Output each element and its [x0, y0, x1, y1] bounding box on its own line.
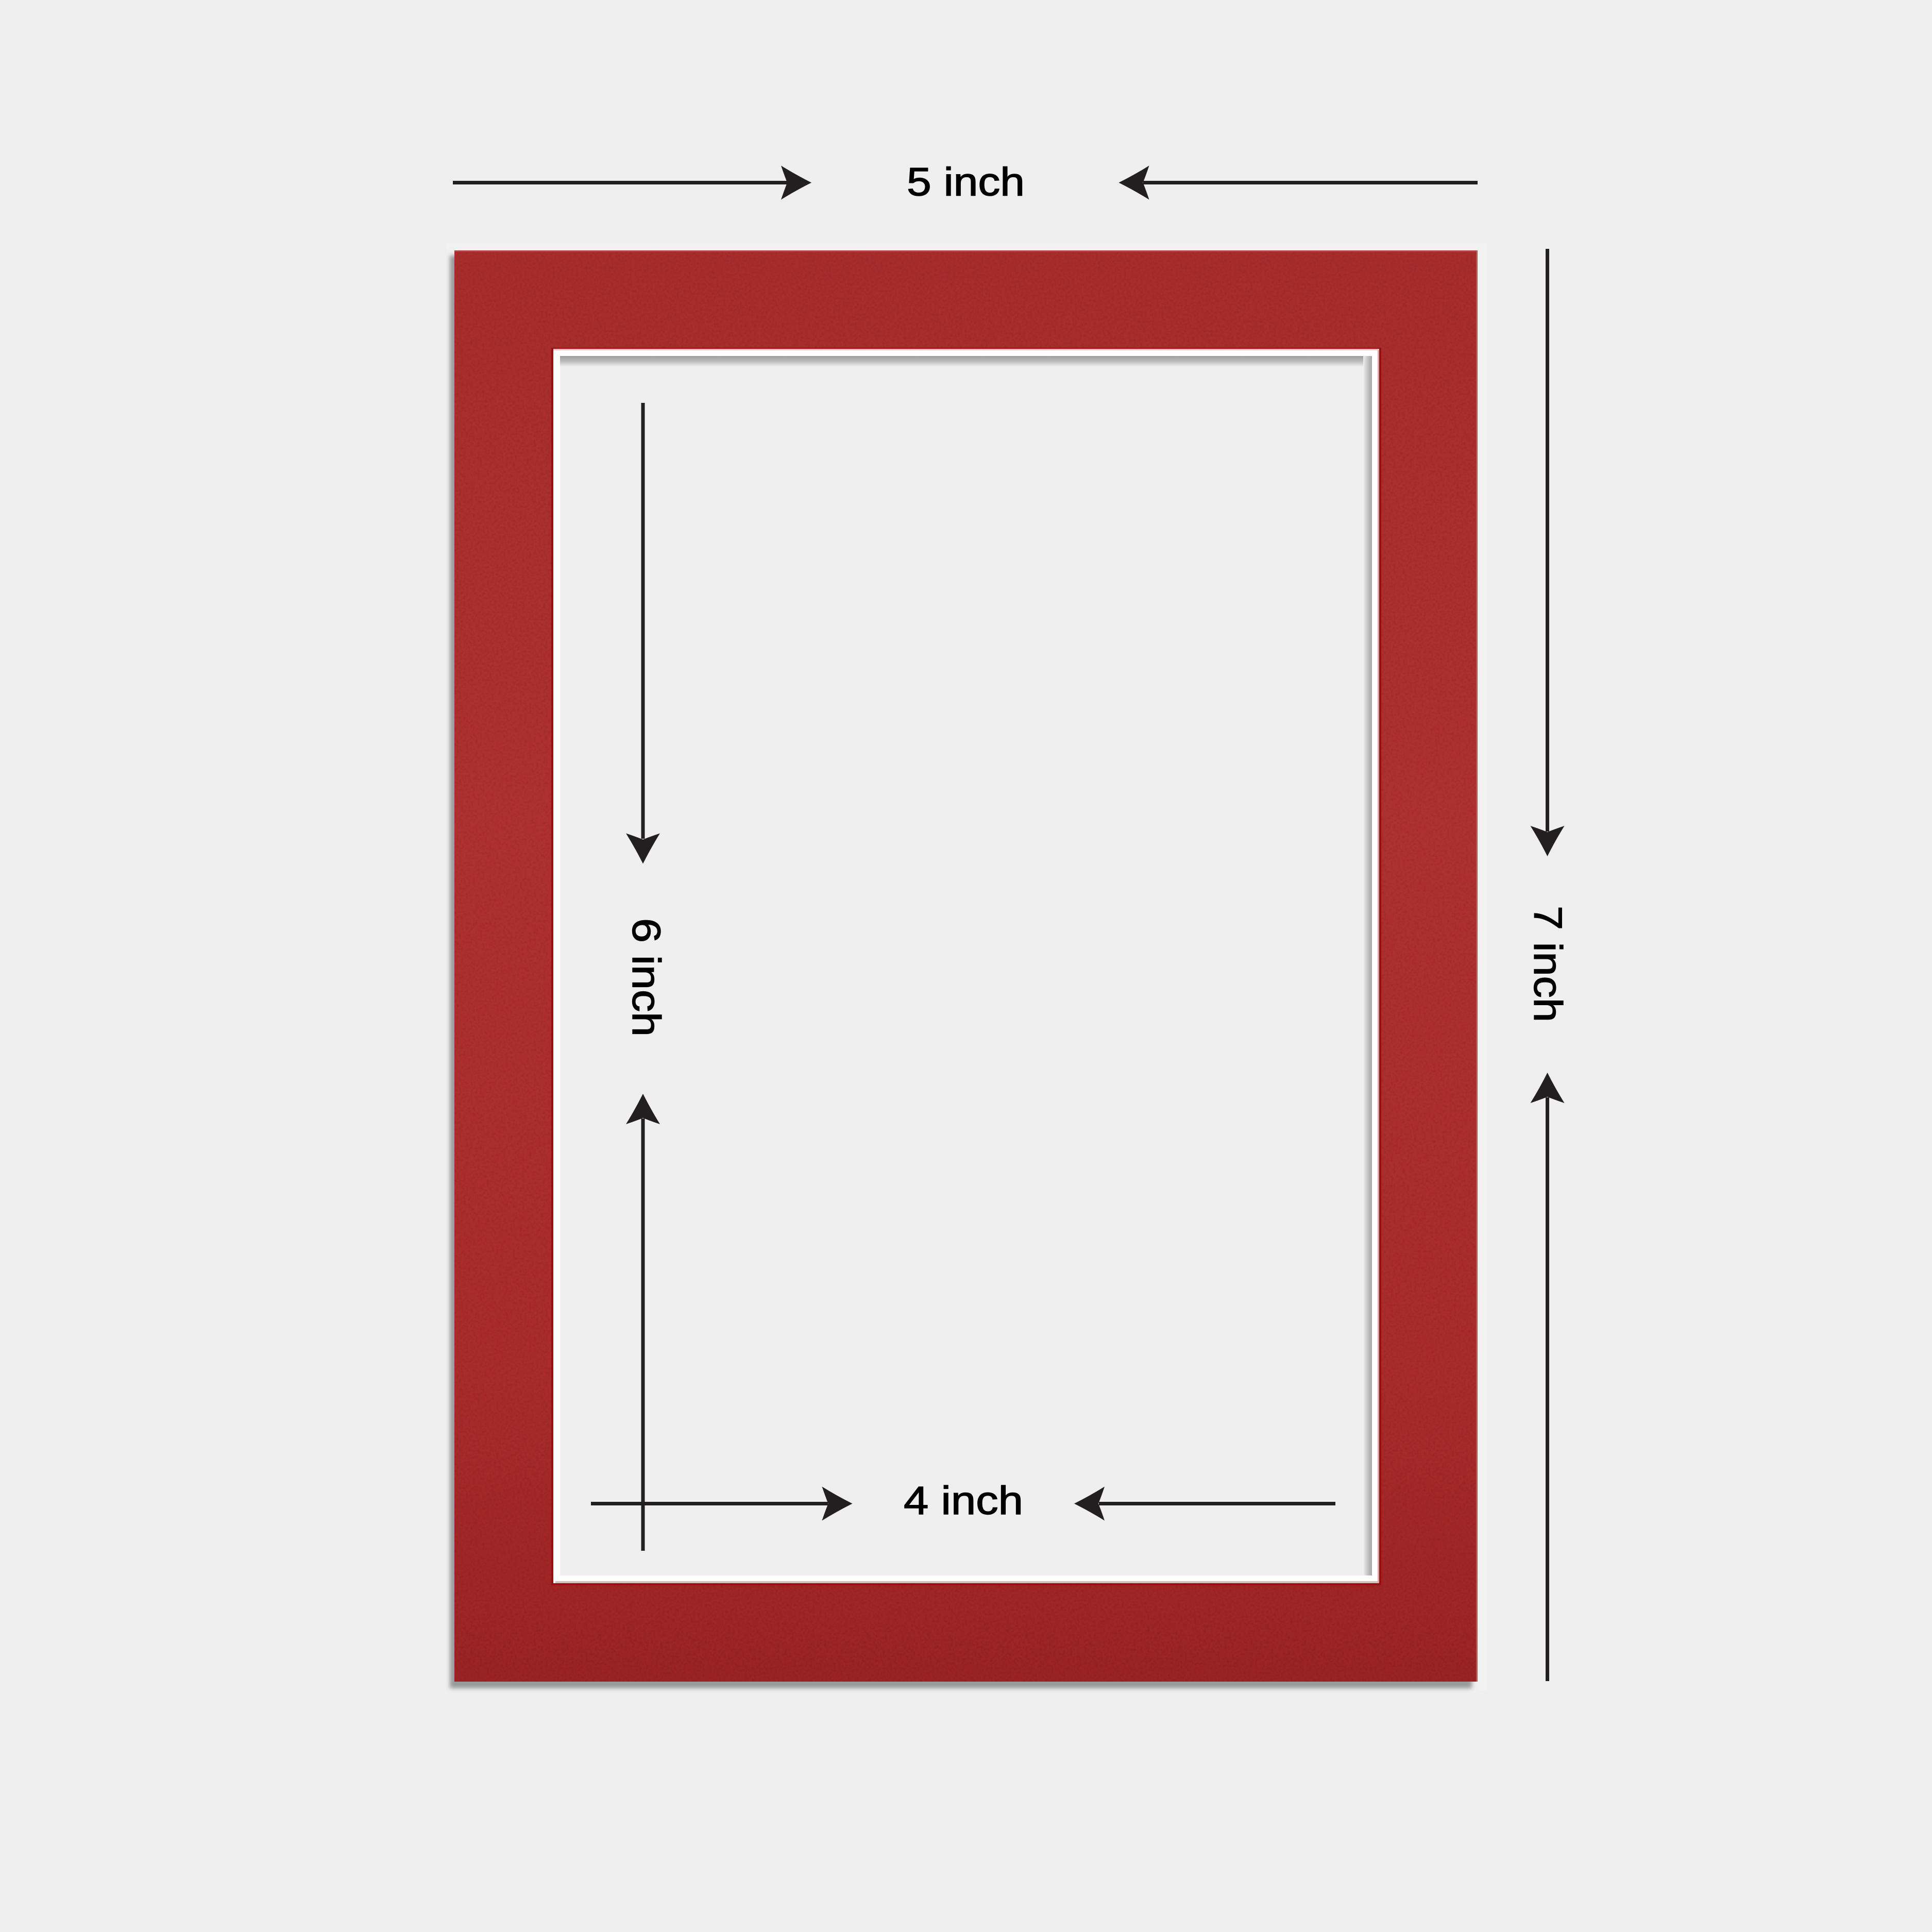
mat paper grain: [454, 250, 1478, 1682]
opening dark edge: [551, 348, 1381, 1585]
inner shadow right: [1363, 356, 1372, 1575]
arrow: outer height, bottom side: [1530, 1073, 1564, 1681]
white bevel: [553, 350, 1379, 1583]
mat board: [454, 250, 1478, 1682]
label: 4 inch: 4 inch: [904, 1479, 1023, 1523]
arrow: inner height, top side: [626, 403, 660, 863]
label: 7 inch: 7 inch: [1526, 906, 1570, 1022]
panel: red photo mat: [446, 243, 1487, 1691]
arrow: inner width, right side: [1074, 1487, 1335, 1521]
label: 5 inch: 5 inch: [907, 160, 1025, 204]
inner shadow top: [560, 356, 1372, 367]
arrow: inner height, bottom side: [626, 1094, 660, 1551]
mat opening: [560, 356, 1372, 1575]
mat light halo: [446, 243, 1487, 1691]
mat drop shadow: [450, 256, 1472, 1688]
arrow: outer width, right side: [1119, 166, 1478, 200]
label: 6 inch: 6 inch: [624, 918, 668, 1037]
arrow: inner width, left side: [591, 1487, 852, 1521]
arrow: outer width, left side: [453, 166, 811, 200]
arrow: outer height, top side: [1530, 249, 1564, 856]
